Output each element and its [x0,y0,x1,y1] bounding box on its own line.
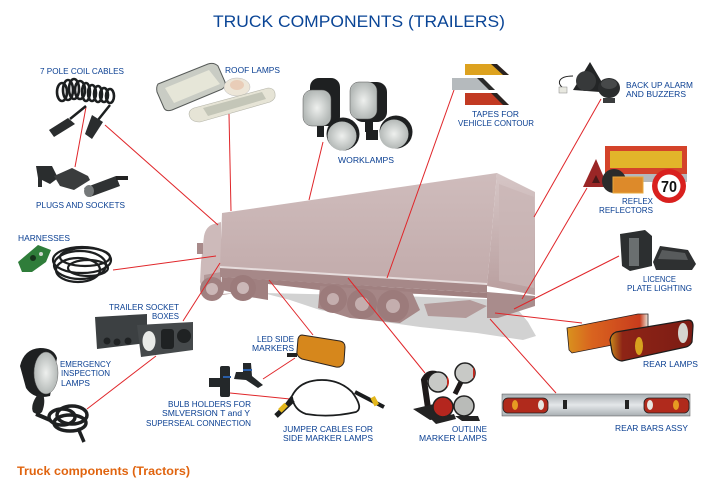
label: outline marker lamps [419,424,487,443]
chassis [222,277,487,300]
label: LED side markers: LED SIDE [257,334,294,344]
icon: harnesses [18,245,111,282]
icon: 7 pole coil cables [49,79,114,139]
label: trailer socket boxes: TRAILER SOCKET [109,302,180,312]
icon: trailer socket boxes [95,314,193,357]
icon: reflex reflectors [583,146,687,203]
label: back up alarm and buzzers [626,80,693,99]
label: outline marker lamps: OUTLINE [452,424,487,434]
icon: jumper cables [276,380,384,416]
icon: outline marker lamps [413,363,480,424]
label: rear bars assy: REAR BARS ASSY [615,423,688,433]
label: licence plate lighting: PLATE LIGHTING [627,283,692,293]
label: back up alarm and buzzers: AND BUZZERS [626,89,686,99]
label: bulb holders [146,399,251,428]
trailer rear wall [487,173,535,295]
label: bulb holders: SMLVERSION T and Y [162,408,250,418]
label: jumper cables: SIDE MARKER LAMPS [283,433,373,443]
label: outline marker lamps: MARKER LAMPS [419,433,487,443]
label: emergency inspection lamps [60,359,111,388]
rear underbody and tail lift [424,292,535,318]
label: reflex reflectors: REFLECTORS [599,205,653,215]
icon: emergency inspection lamp [20,348,87,442]
label: harnesses: HARNESSES [18,233,70,243]
label: tapes for vehicle contour: TAPES FOR [472,109,519,119]
tractor cab [200,222,222,294]
icon: back up alarm and buzzers [559,62,620,103]
label: worklamps: WORKLAMPS [338,155,394,165]
label: licence plate lighting: LICENCE [643,274,676,284]
label: plugs and sockets: PLUGS AND SOCKETS [36,200,125,210]
label: LED side markers [252,334,294,353]
label: roof lamps: ROOF LAMPS [225,65,280,75]
label: rear lamps: REAR LAMPS [643,359,698,369]
title: TRUCK COMPONENTS (TRAILERS) [213,12,505,31]
icon: licence plate lighting [620,230,696,271]
label: emergency inspection lamps: LAMPS [61,378,90,388]
label: 7 pole coil cables: 7 POLE COIL CABLES [40,66,124,76]
footer link: truck components tractors: Truck components (Tractors) [17,464,190,478]
icon: plugs and sockets [36,166,128,197]
label: trailer socket boxes [109,302,180,321]
side rail [220,267,487,293]
icon: tapes for vehicle contour [452,64,509,105]
label: jumper cables: JUMPER CABLES FOR [283,424,373,434]
label: LED side markers: MARKERS [252,343,294,353]
speed limit sign: 70 [661,179,677,196]
connector lines [75,90,619,409]
label: bulb holders: BULB HOLDERS FOR [168,399,251,409]
ground shadow [263,293,536,340]
label: tapes for vehicle contour: VEHICLE CONTOUR [458,118,534,128]
icon: rear bar assembly [502,394,690,416]
trailer side wall [220,173,497,286]
label: licence plate lighting [627,274,692,293]
icon: roof lamps [157,63,275,122]
icon: bulb holders [209,363,263,397]
label: emergency inspection lamps: EMERGENCY [60,359,111,369]
label: trailer socket boxes: BOXES [152,311,179,321]
label: tapes for vehicle contour [458,109,534,128]
icon: rear lamps [567,314,693,361]
truck illustration [197,173,536,340]
label: bulb holders: SUPERSEAL CONNECTION [146,418,251,428]
icon: worklamps [303,78,412,150]
wheels [200,275,409,322]
label: jumper cables [283,424,373,443]
label: back up alarm and buzzers: BACK UP ALARM [626,80,693,90]
icon: LED side marker [287,335,345,367]
label: reflex reflectors [599,196,653,215]
label: reflex reflectors: REFLEX [622,196,653,206]
label: emergency inspection lamps: INSPECTION [61,368,110,378]
